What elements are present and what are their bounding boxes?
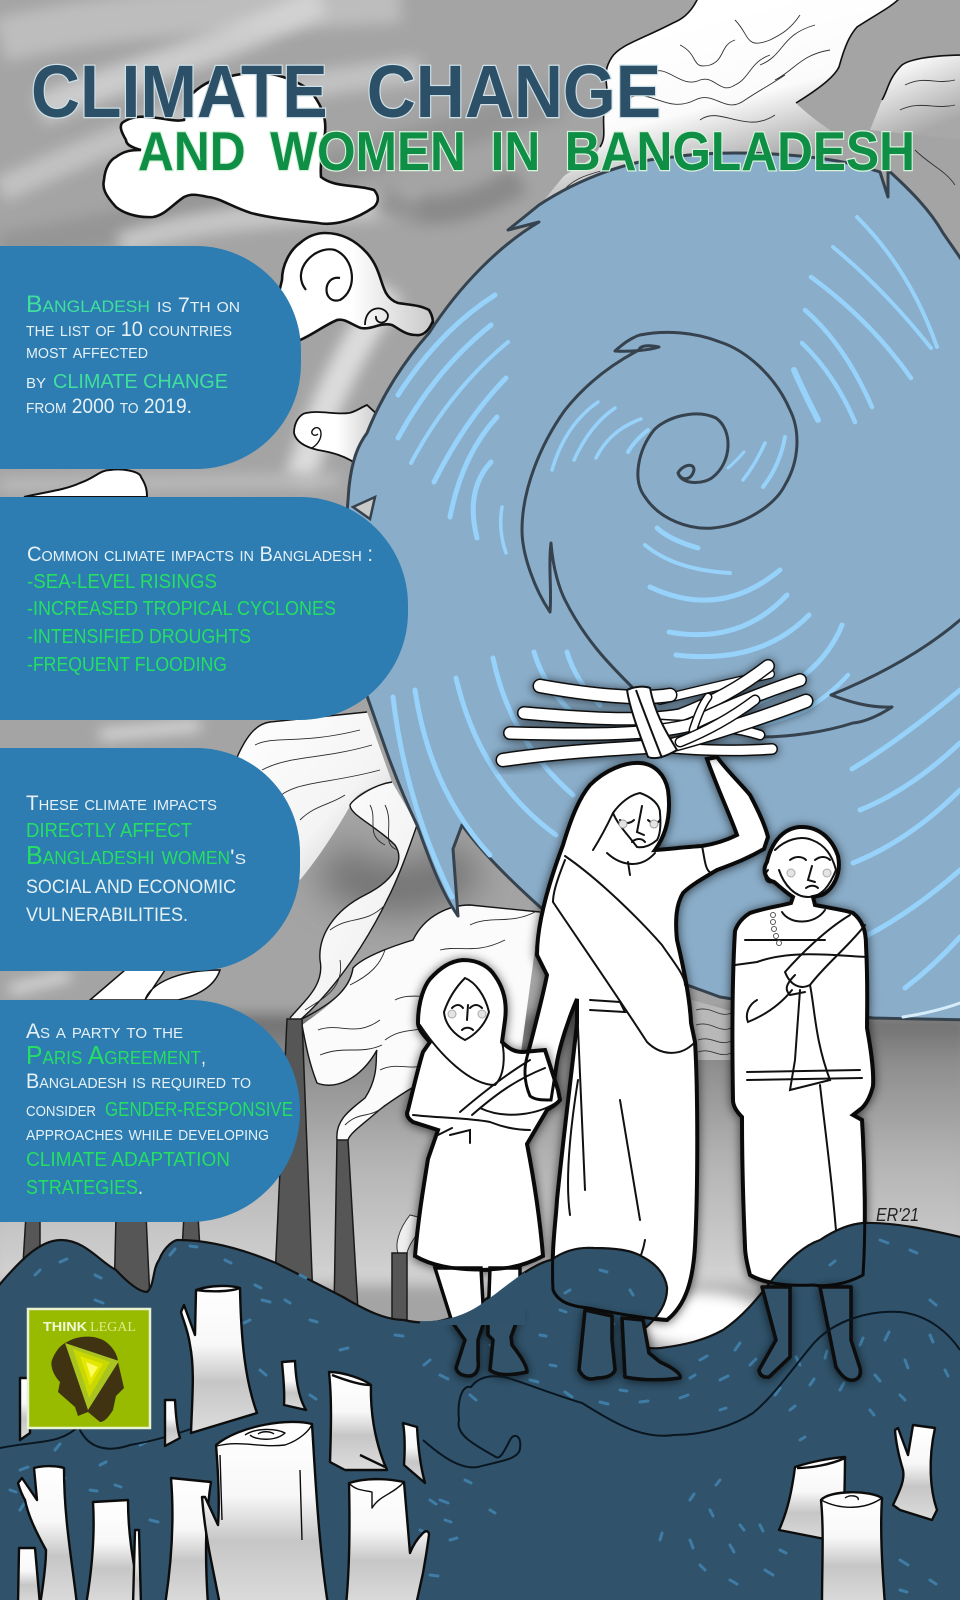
stump: far left tall (18, 1466, 77, 1600)
firewood bundle (503, 666, 806, 760)
panel text: most affected (26, 340, 148, 363)
white lower legs above ground (435, 1268, 520, 1322)
smoke plumes from chimneys (90, 712, 735, 1253)
stump: centre right with branch (346, 1479, 429, 1600)
stump: mid (329, 1372, 387, 1470)
panel text: from 2000 to 2019. (26, 395, 192, 418)
logo: two heads silhouette (51, 1337, 124, 1422)
panel: Paris Agreement (0, 1000, 300, 1222)
panel text: is 7th on (157, 294, 240, 317)
young woman: figure (732, 827, 873, 1286)
stump: right rear (779, 1457, 845, 1543)
panel text: -INCREASED TROPICAL CYCLONES (27, 598, 336, 620)
logo: nested triangle (65, 1343, 119, 1410)
stump: branch sliver (133, 1530, 141, 1600)
stump: sliver (403, 1423, 425, 1483)
stump: thin (282, 1361, 306, 1410)
smoke band: upper (235, 712, 392, 880)
panel: common climate impacts (0, 497, 408, 720)
panel text: SOCIAL AND ECONOMIC (26, 877, 236, 898)
mother figure body (525, 757, 768, 1320)
logo wordmark: THINK (43, 1319, 88, 1334)
woman with firewood: figure (503, 666, 806, 1320)
panel text: As a party to the (26, 1020, 183, 1043)
young woman's necklace (770, 912, 782, 946)
figure legs and feet over ground (452, 1287, 860, 1380)
stump: far right with branch (893, 1425, 937, 1520)
stump: left mid (86, 1500, 141, 1600)
panel text: GENDER-RESPONSIVE (105, 1099, 293, 1121)
cyclone dark spiral lines (522, 332, 960, 737)
panel text: 's (230, 846, 246, 869)
ground hill overlapping girl's legs (420, 1272, 525, 1325)
artist signature: ER'21 (876, 1205, 919, 1225)
cloud: between panels one and two (24, 469, 147, 497)
panel text: Bangladesh (26, 291, 150, 318)
panel text: -INTENSIFIED DROUGHTS (27, 626, 251, 648)
stump: centre left (165, 1478, 211, 1600)
panel text: Bangladesh is required to (26, 1070, 251, 1093)
panel text: approaches while developing (26, 1122, 269, 1145)
panel text: by (26, 370, 46, 393)
cyclone light blue wind strokes (393, 217, 960, 1017)
panel text: CLIMATE ADAPTATION (26, 1149, 230, 1171)
stump: right front (821, 1492, 885, 1600)
panel text: Common climate impacts in Bangladesh : (27, 543, 373, 566)
panel text: STRATEGIES (26, 1177, 138, 1199)
panel text: These climate impacts (26, 792, 217, 815)
stump: small by logo (165, 1400, 180, 1446)
mother's cheeks (619, 820, 658, 828)
girl with books: figure (407, 960, 560, 1270)
panel text: , (201, 1046, 206, 1069)
young woman's face, scarf and arm lines (735, 838, 866, 1285)
stump: small behind logo (20, 1378, 30, 1440)
cloud: small curl (294, 405, 380, 467)
tree stumps (18, 1286, 937, 1600)
stump: biggest with rings (202, 1422, 328, 1600)
factory chimneys (22, 1019, 407, 1330)
smoke band: rising from first chimney (290, 782, 417, 1020)
title (31, 50, 915, 182)
logo wordmark (43, 1319, 136, 1335)
young woman body (732, 827, 873, 1286)
thin wandering thread on ground (0, 1312, 960, 1467)
panel text: -SEA-LEVEL RISINGS (27, 571, 217, 593)
young woman's cheeks (787, 869, 831, 877)
ground speckles (10, 1240, 948, 1592)
panel text (26, 792, 246, 926)
panel: Bangladesh ranking (0, 246, 301, 469)
panel text: -FREQUENT FLOODING (27, 654, 227, 676)
cloud: swirl beside first panel (270, 233, 433, 340)
logo wordmark: LEGAL (90, 1320, 136, 1335)
figure outlines seen through hill (407, 757, 873, 1320)
panel text: Bangladeshi women (26, 840, 230, 870)
smoke band: rising from second chimney (302, 905, 540, 1140)
panel text: DIRECTLY AFFECT (26, 820, 192, 842)
panel text (27, 543, 373, 676)
panel text: . (138, 1176, 143, 1199)
mother's face and sari lines (553, 793, 711, 1305)
stump: far left short (18, 1548, 40, 1600)
panel text: the list of 10 countries (26, 318, 232, 341)
panel: effect on women (0, 748, 300, 971)
girl body (407, 960, 560, 1270)
panel text: Paris Agreement (26, 1040, 201, 1070)
panel text (26, 291, 240, 418)
cyclone spiral body (345, 153, 960, 1020)
stump: tall with branch (181, 1286, 257, 1433)
firewood rope knot (627, 687, 677, 758)
smoke plume: top right (540, 0, 960, 205)
cloud: behind title (103, 73, 378, 224)
girl's cheeks (448, 1010, 486, 1018)
logo: Think Legal (28, 1309, 150, 1428)
ground: dark blue hills (0, 1223, 960, 1600)
girl face and hood (413, 978, 560, 1143)
panel text (26, 1020, 293, 1199)
panel text: consider (26, 1098, 96, 1121)
title: CLIMATE CHANGE (31, 50, 661, 133)
panel text: CLIMATE CHANGE (53, 371, 228, 393)
panel text: VULNERABILITIES. (26, 905, 188, 926)
